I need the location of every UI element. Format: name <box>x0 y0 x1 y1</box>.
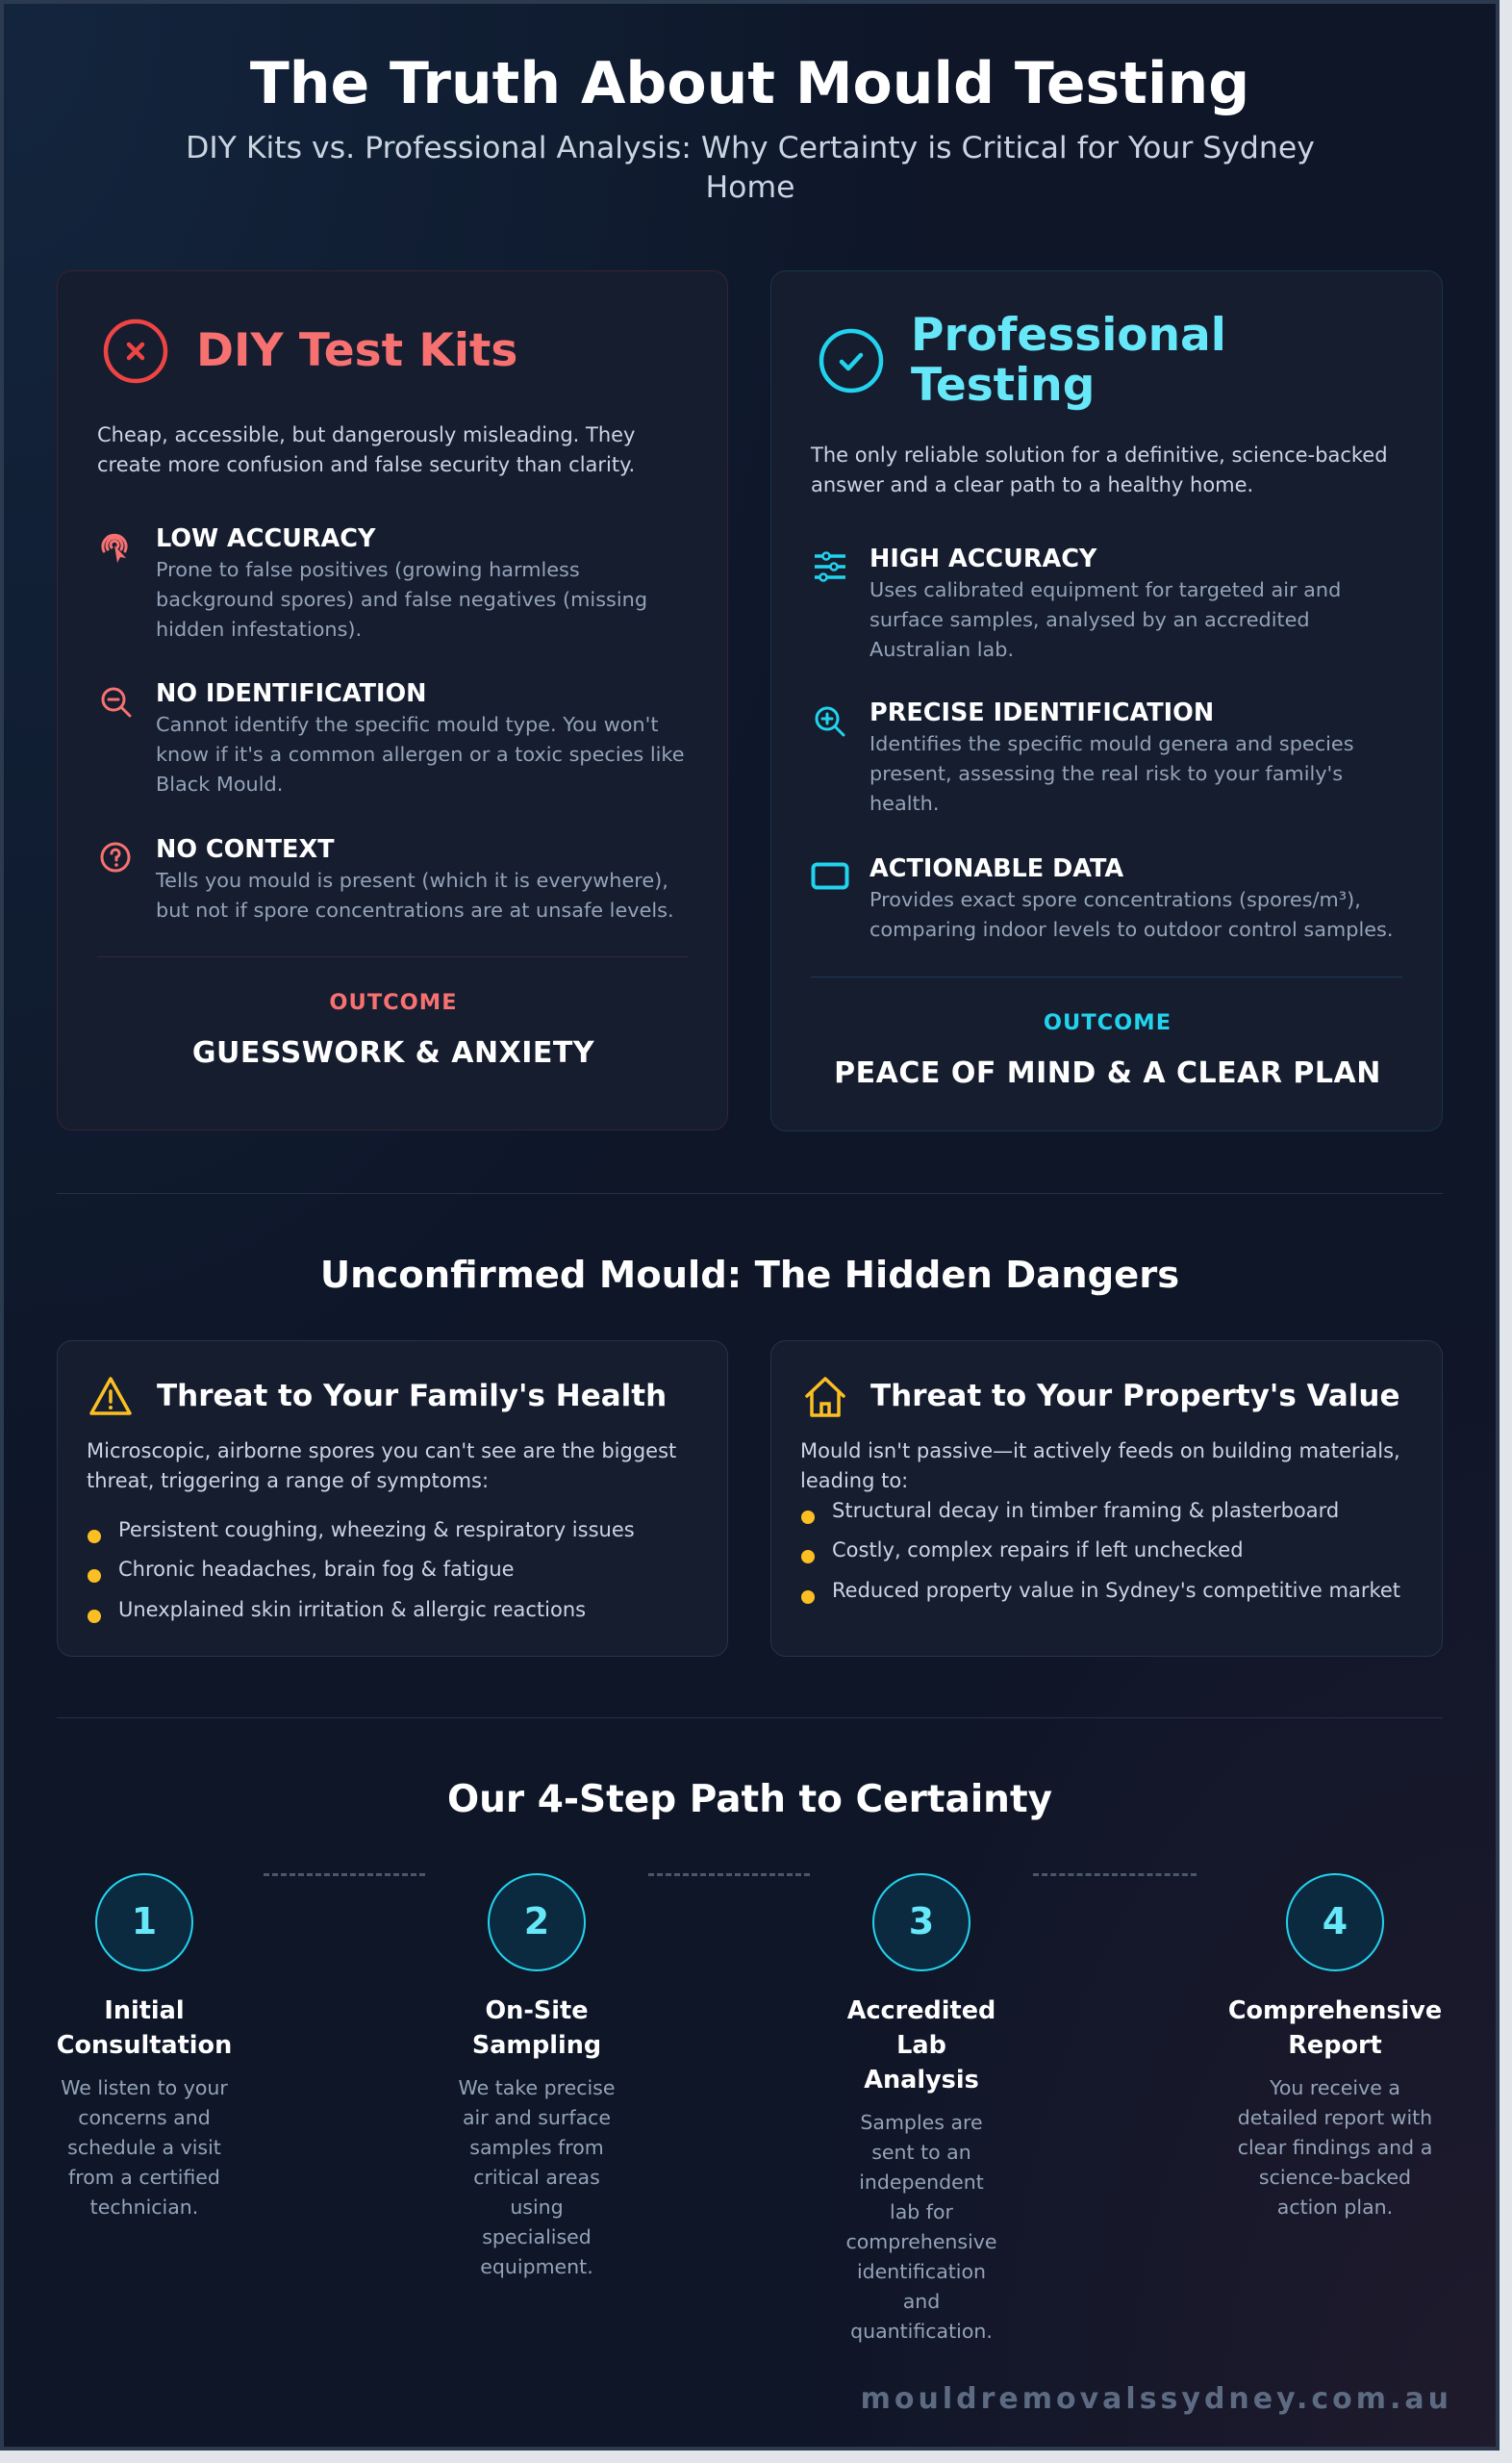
step 4: You receive a detailed report with clear findings and a science-backed action plan. <box>1238 2076 1432 2219</box>
heading: Threat to Your Family's Health <box>157 1379 667 1413</box>
item: no context <box>100 835 674 922</box>
item: low accuracy: LOW ACCURACY <box>156 524 375 553</box>
step 1: Initial Consultation <box>57 1996 232 2060</box>
step 2 <box>459 1873 615 2278</box>
step 1: 1 <box>132 1900 157 1942</box>
item: low accuracy: Prone to false positives (growing harmless background spores) and false negatives (missing hidden infestations). <box>156 558 647 641</box>
item: actionable data: Provides exact spore concentrations (spores/m³), comparing indoor levels to outdoor control samples. <box>869 888 1393 941</box>
outcome: OUTCOME <box>1044 1010 1172 1035</box>
item: actionable data <box>812 854 1393 941</box>
bullet list: Reduced property value in Sydney's competitive market <box>832 1579 1400 1602</box>
step 4 <box>1228 1873 1442 2219</box>
outcome: GUESSWORK & ANXIETY <box>192 1036 594 1070</box>
step 2: We take precise air and surface samples from critical areas using specialised equipment. <box>459 2076 615 2278</box>
panel: DIY test kits <box>57 270 728 1130</box>
heading: Threat to Your Property's Value <box>870 1379 1400 1413</box>
title: The Truth About Mould Testing <box>250 50 1249 117</box>
bullet list: Persistent coughing, wheezing & respiratory issues <box>118 1518 635 1541</box>
step 3 <box>845 1873 997 2343</box>
item: high accuracy: HIGH ACCURACY <box>869 545 1096 573</box>
item: precise identification <box>816 698 1354 815</box>
bullet list: Costly, complex repairs if left unchecked <box>832 1538 1244 1562</box>
step 2: 2 <box>524 1900 549 1942</box>
heading: Professional Testing: Professional <box>911 309 1226 362</box>
bullet list: Structural decay in timber framing & plasterboard <box>832 1499 1339 1522</box>
step 3: 3 <box>909 1900 934 1942</box>
item: precise identification: PRECISE IDENTIFICATION <box>869 698 1214 727</box>
panel: professional testing <box>770 270 1443 1131</box>
arrow: dashed connector 1-2 <box>264 1873 425 1876</box>
step 1: We listen to your concerns and schedule a visit from a certified technician. <box>61 2076 228 2219</box>
heading: hidden dangers: Unconfirmed Mould: The Hidden Dangers <box>320 1254 1179 1297</box>
icon: target pointer <box>101 533 128 563</box>
icon: question <box>100 843 131 872</box>
description: Mould isn't passive—it actively feeds on building materials, leading to: <box>800 1439 1400 1492</box>
item: no context: Tells you mould is present (which it is everywhere), but not if spore concentrations are at unsafe levels. <box>156 869 674 922</box>
heading: 4-step path: Our 4-Step Path to Certainty <box>447 1778 1052 1821</box>
panel: health threat <box>57 1340 728 1657</box>
icon: house <box>805 1377 845 1417</box>
intro text: The only reliable solution for a definitive, science-backed answer and a clear path to a healthy home. <box>811 444 1388 496</box>
outcome: PEACE OF MIND & A CLEAR PLAN <box>834 1056 1381 1090</box>
item: no context: NO CONTEXT <box>156 835 335 864</box>
heading: DIY Test Kits: DIY Test Kits <box>196 324 517 377</box>
bullet list: Chronic headaches, brain fog & fatigue <box>118 1558 515 1581</box>
step 4: 4 <box>1323 1900 1348 1942</box>
item: high accuracy: Uses calibrated equipment for targeted air and surface samples, analysed by an accredited Australian lab. <box>869 578 1341 661</box>
icon: zoom out <box>102 687 132 718</box>
item: precise identification: Identifies the specific mould genera and species present, assessing the real risk to your family's health. <box>869 732 1354 815</box>
arrow: dashed connector 3-4 <box>1033 1873 1197 1876</box>
heading: Professional Testing <box>911 309 1226 412</box>
heading: Professional Testing: Testing <box>911 359 1095 412</box>
bullet list: Unexplained skin irritation & allergic reactions <box>118 1598 586 1621</box>
description: Microscopic, airborne spores you can't see are the biggest threat, triggering a range of symptoms: <box>87 1439 676 1492</box>
icon: zoom in <box>816 706 844 737</box>
step 4: Comprehensive Report <box>1228 1996 1442 2060</box>
outcome <box>834 1010 1381 1090</box>
item: actionable data: ACTIONABLE DATA <box>869 854 1123 883</box>
item: low accuracy <box>101 524 647 641</box>
bullet list <box>801 1499 1400 1604</box>
bullet list <box>88 1518 635 1623</box>
icon: check circle <box>819 329 883 393</box>
step 2: On-Site Sampling <box>472 1996 601 2060</box>
icon: x circle <box>104 319 167 383</box>
panel: property threat <box>770 1340 1443 1657</box>
outcome <box>192 990 594 1070</box>
item: no identification: NO IDENTIFICATION <box>156 679 426 708</box>
arrow: dashed connector 2-3 <box>648 1873 810 1876</box>
intro text: Cheap, accessible, but dangerously misleading. They create more confusion and false security than clarity. <box>97 423 635 476</box>
outcome: OUTCOME <box>329 990 458 1015</box>
subtitle: DIY Kits vs. Professional Analysis: Why Certainty is Critical for Your Sydney Home <box>186 131 1315 205</box>
icon: sliders <box>815 551 845 582</box>
icon: screen <box>812 862 848 889</box>
item: no identification <box>102 679 685 796</box>
item: no identification: Cannot identify the specific mould type. You won't know if it's a common allergen or a toxic species like Black Mould. <box>156 713 685 796</box>
step 1 <box>57 1873 232 2219</box>
step 3: Samples are sent to an independent lab for comprehensive identification and quantification. <box>845 2111 997 2343</box>
step 3: Accredited Lab Analysis <box>847 1996 995 2095</box>
item: high accuracy <box>815 545 1341 661</box>
footer: website: mouldremovalssydney.com.au <box>861 2382 1452 2416</box>
icon: warning <box>89 1377 132 1415</box>
